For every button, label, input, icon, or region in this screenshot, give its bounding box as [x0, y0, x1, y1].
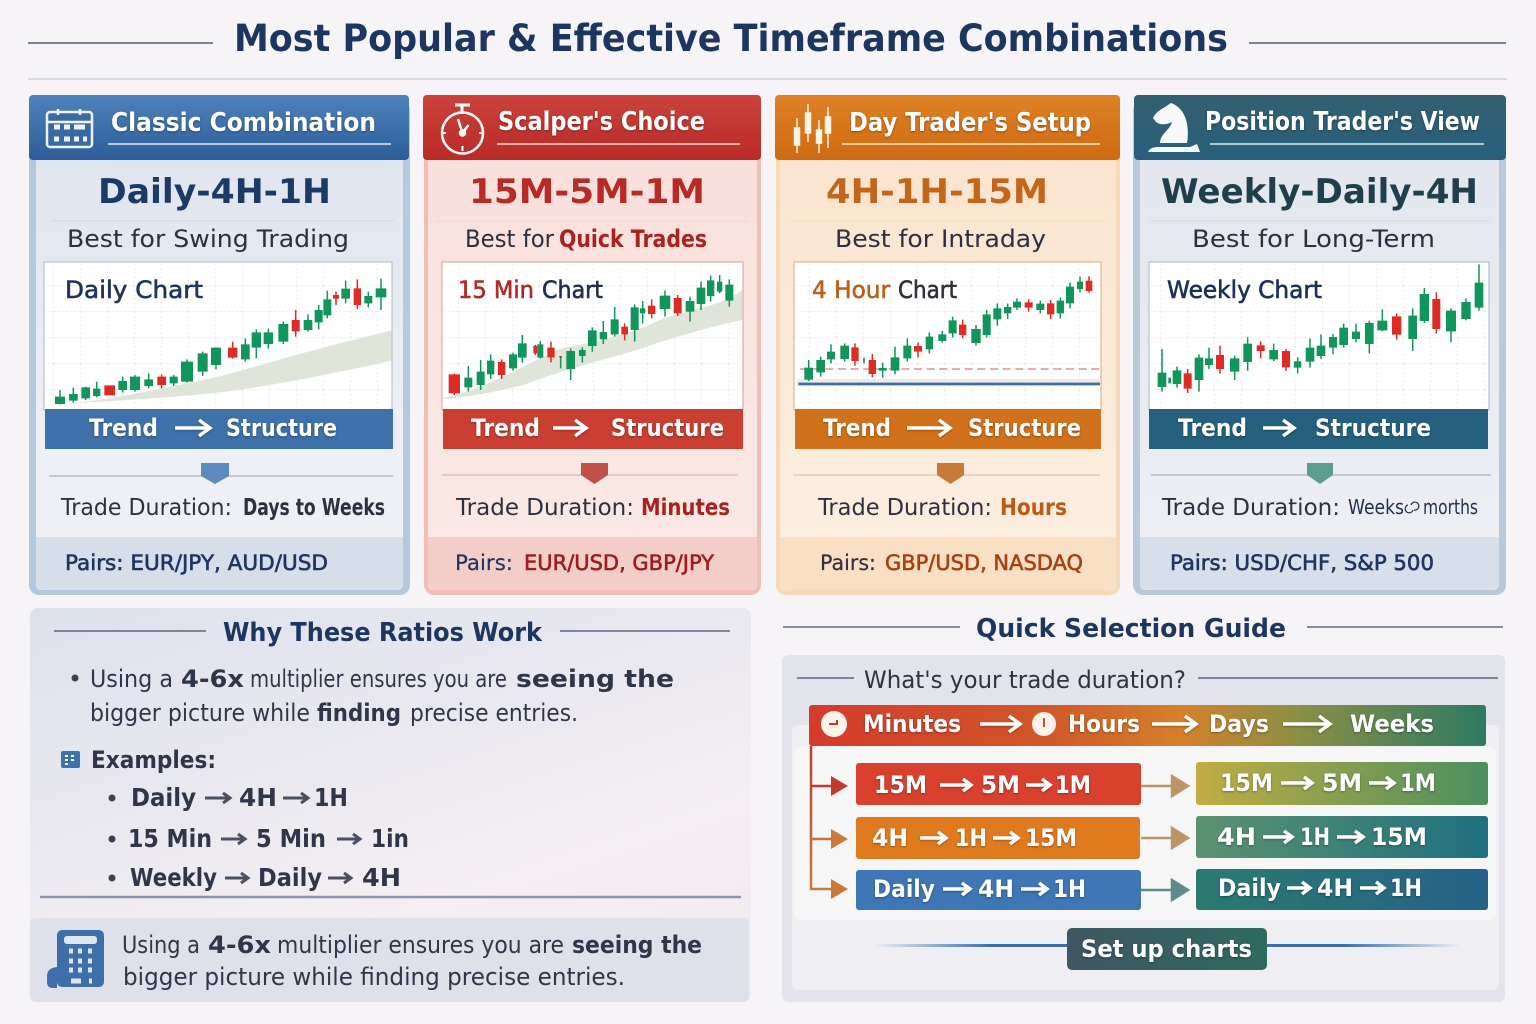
candlestick chart: 4 hour: 4 Hour — [812, 276, 890, 304]
icon: calendar — [47, 109, 92, 147]
best for text: Best for — [465, 225, 554, 253]
examples list: 1H — [314, 783, 348, 812]
row: 4H right: 15M — [1371, 823, 1427, 851]
candlestick chart: 4 hour — [794, 262, 1101, 410]
row: Daily left: 4H — [978, 875, 1014, 903]
down arrow divider — [49, 463, 393, 484]
heading: Why These Ratios Work — [223, 618, 543, 648]
icon: checklist — [61, 751, 80, 768]
combination name: Daily-4H-1H — [98, 172, 331, 212]
candlestick chart: 4 hour: Chart — [898, 276, 957, 304]
row: 15M right: 15M — [1220, 769, 1273, 797]
callout: Using a — [122, 931, 200, 959]
examples list: Daily — [131, 783, 196, 812]
combination name: 15M-5M-1M — [469, 172, 705, 212]
row: 15M left — [856, 763, 1141, 805]
icon: clock minutes — [821, 711, 847, 737]
callout: seeing the — [572, 931, 702, 959]
panel: quick selection guide — [782, 655, 1505, 1002]
explanation text: bigger picture while — [90, 699, 310, 727]
candlestick chart: 15 min: Chart — [542, 276, 603, 304]
header: position trader's view: Position Trader's View — [1205, 107, 1480, 137]
trend to structure band — [443, 409, 743, 449]
header: classic combination — [29, 95, 409, 160]
trade duration: Hours — [1000, 495, 1067, 521]
explanation text: finding — [317, 699, 401, 727]
candlestick chart: weekly: Weekly Chart — [1167, 276, 1322, 304]
set up charts button: Set up charts — [1081, 935, 1252, 963]
branch connector — [811, 746, 848, 899]
icon: calculator — [47, 930, 104, 988]
best for text: Best for Swing Trading — [67, 225, 349, 253]
best for text: Best for Long-Term — [1192, 225, 1435, 253]
explanation text: multiplier ensures you are — [250, 665, 507, 693]
trade duration: Trade Duration: — [60, 495, 232, 521]
trade duration: Trade Duration: — [1161, 495, 1340, 521]
duration flow bar: Minutes — [863, 710, 961, 738]
callout — [30, 918, 749, 1002]
header: day trader's setup — [775, 95, 1120, 160]
row: 4H left: 4H — [872, 824, 908, 852]
row: 15M left: 15M — [874, 771, 927, 799]
examples list: 4H — [239, 783, 277, 812]
best for text: Quick Trades — [559, 225, 707, 253]
row: 4H right: 1H — [1300, 823, 1330, 851]
pairs: Pairs: EUR/JPY, AUD/USD — [65, 551, 328, 576]
examples list — [108, 783, 409, 892]
arrow — [1141, 828, 1188, 848]
duration flow bar — [809, 705, 1486, 746]
candlestick chart: weekly — [1149, 262, 1489, 410]
trade duration — [1161, 495, 1478, 521]
combination name: 4H-1H-15M — [826, 172, 1048, 212]
panel: day trader's setup — [775, 95, 1120, 595]
panel: classic combination — [29, 95, 410, 595]
question: What's your trade duration? — [864, 666, 1186, 694]
row: 15M left: 5M — [981, 771, 1020, 799]
duration flow bar: Days — [1209, 710, 1269, 738]
row: 4H left — [856, 817, 1140, 859]
row: Daily right: 4H — [1317, 874, 1353, 902]
panel: position trader's view — [1133, 95, 1506, 595]
trade duration — [60, 495, 385, 521]
title: Most Popular & Effective Timeframe Combinations — [234, 17, 1228, 60]
trend to structure band: Structure — [1315, 414, 1431, 442]
row: 15M left: 1M — [1055, 771, 1091, 799]
header: classic combination: Classic Combination — [111, 108, 376, 138]
trade duration: Weeks — [1348, 495, 1404, 519]
best for text: Best for Intraday — [835, 225, 1046, 253]
trend to structure band: Trend — [823, 414, 891, 442]
trend to structure band — [795, 409, 1101, 449]
icon: clock hours — [1032, 712, 1056, 736]
panel: scalper's choice — [423, 95, 761, 595]
callout: bigger picture while finding precise entries. — [123, 963, 625, 991]
row: 4H left: 1H — [955, 824, 987, 852]
combination name: Weekly-Daily-4H — [1161, 172, 1478, 212]
header: day trader's setup: Day Trader's Setup — [849, 108, 1091, 138]
row: Daily left: Daily — [873, 875, 935, 903]
trend to structure band: Structure — [968, 414, 1081, 442]
candlestick chart: daily — [44, 262, 392, 410]
arrow — [1141, 776, 1188, 796]
trade duration: Trade Duration: — [817, 495, 992, 521]
pairs: Pairs: — [455, 551, 513, 576]
trend to structure band: Structure — [226, 414, 337, 442]
candlestick chart: daily: Daily Chart — [65, 276, 203, 304]
heading: quick selection guide: Quick Selection Guide — [976, 614, 1286, 644]
examples list: 4H — [362, 863, 401, 892]
row: 15M right: 5M — [1322, 769, 1362, 797]
explanation text: seeing the — [516, 665, 674, 693]
trade duration: Minutes — [641, 495, 730, 521]
duration flow bar: Weeks — [1350, 710, 1434, 738]
trend to structure band — [1149, 409, 1488, 449]
candlestick chart: 15 min — [442, 262, 743, 410]
row: 4H right: 4H — [1217, 823, 1256, 851]
pairs: Pairs: — [820, 551, 876, 576]
row: Daily left: 1H — [1053, 875, 1086, 903]
icon: stopwatch — [442, 105, 483, 154]
examples heading: Examples: — [91, 746, 216, 774]
header: position trader's view — [1134, 95, 1506, 160]
row: Daily left — [856, 870, 1141, 910]
explanation text — [72, 665, 674, 727]
callout: 4-6x — [208, 931, 272, 959]
candlestick chart: 15 min: 15 Min — [458, 276, 534, 304]
explanation text: precise entries. — [410, 699, 578, 727]
panel: why these ratios work — [30, 608, 751, 1002]
trade duration: Days to Weeks — [243, 495, 385, 521]
row: Daily right: Daily — [1218, 874, 1281, 902]
trend to structure band: Trend — [471, 414, 540, 442]
trade duration: morths — [1423, 495, 1478, 519]
header: scalper's choice: Scalper's Choice — [498, 107, 705, 137]
down arrow divider — [793, 463, 1100, 484]
trade duration — [455, 495, 730, 521]
examples list: 5 Min — [256, 824, 326, 853]
row: Daily right: 1H — [1390, 874, 1422, 902]
pairs: Pairs: USD/CHF, S&P 500 — [1170, 551, 1434, 576]
trend to structure band — [45, 409, 393, 449]
explanation text: Using a — [90, 665, 173, 693]
row: 15M right: 1M — [1400, 769, 1436, 797]
examples list: Daily — [258, 863, 322, 892]
duration flow bar: Hours — [1068, 710, 1140, 738]
trend to structure band: Trend — [1178, 414, 1247, 442]
icon: chess knight — [1148, 103, 1200, 152]
callout: multiplier ensures you are — [277, 931, 564, 959]
pairs: GBP/USD, NASDAQ — [885, 551, 1083, 576]
header: scalper's choice — [423, 95, 761, 160]
row: 15M right — [1196, 762, 1488, 805]
row: Daily right — [1196, 869, 1488, 910]
down arrow divider — [1151, 463, 1491, 484]
arrow — [1141, 880, 1188, 900]
examples list: 15 Min — [128, 824, 212, 853]
pairs: EUR/USD, GBP/JPY — [524, 551, 715, 576]
row: 4H right — [1196, 816, 1488, 858]
row: 4H left: 15M — [1025, 824, 1077, 852]
trend to structure band: Trend — [89, 414, 158, 442]
icon: candlesticks — [794, 104, 830, 153]
examples list: 1in — [371, 824, 409, 853]
best for text — [465, 225, 707, 253]
explanation text: 4-6x — [181, 665, 245, 693]
down arrow divider — [442, 463, 738, 484]
set up charts button — [875, 928, 1460, 970]
trend to structure band: Structure — [611, 414, 724, 442]
examples list: Weekly — [130, 863, 217, 892]
trade duration: Trade Duration: — [455, 495, 634, 521]
